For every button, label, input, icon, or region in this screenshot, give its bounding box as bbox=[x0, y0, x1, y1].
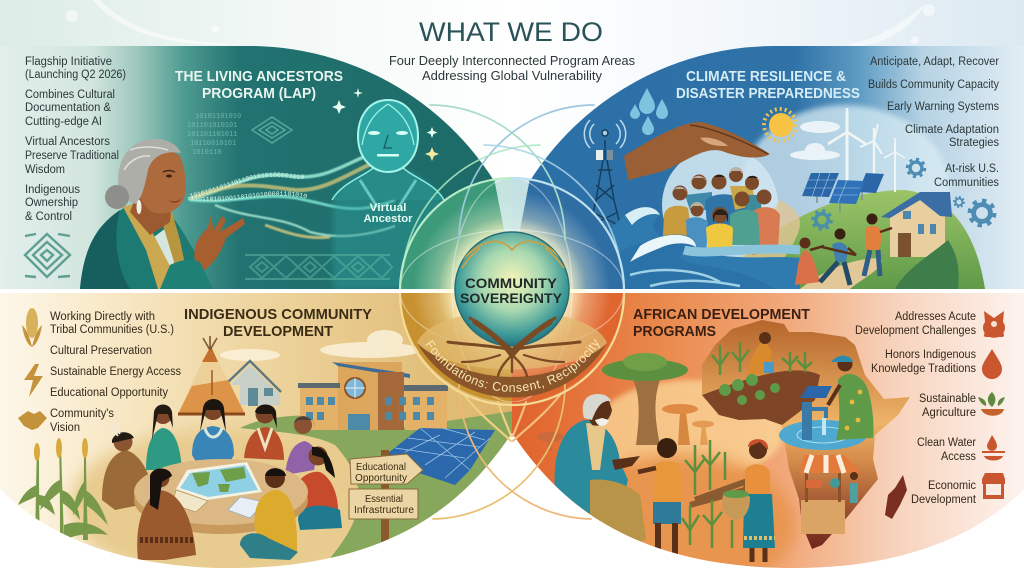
icon: wooden signpost bbox=[349, 450, 423, 542]
icon: corn stalks bbox=[18, 445, 108, 540]
subtitle: Addressing Global Vulnerability bbox=[422, 69, 603, 83]
heading: Climate Resilience: DISASTER PREPAREDNESS bbox=[676, 85, 860, 102]
sandy ground haze bbox=[63, 426, 329, 568]
text block: Climate points: Builds Community Capacity bbox=[868, 79, 999, 91]
text block: Climate points bbox=[868, 56, 999, 189]
text block: Living Ancestors points: Flagship Initiative bbox=[25, 56, 112, 68]
panel: Indigenous Community Development bbox=[0, 290, 520, 572]
text block: Climate points: At-risk U.S. bbox=[945, 163, 999, 175]
text block: African points: Knowledge Traditions bbox=[871, 363, 976, 375]
sky glow bbox=[741, 102, 950, 229]
subtitle: Four Deeply Interconnected Program Areas bbox=[389, 54, 635, 68]
icon: solar array bbox=[383, 428, 495, 485]
icon: corn bbox=[22, 308, 42, 347]
icon: lightning bolt bbox=[24, 364, 43, 397]
page background bbox=[0, 0, 1024, 289]
icon: wind turbines bbox=[828, 108, 905, 192]
icon: wooden signpost: Opportunity bbox=[355, 473, 407, 484]
protective dome bbox=[662, 147, 778, 263]
warm sun haze bbox=[606, 377, 784, 471]
icon: Madagascar bbox=[885, 475, 907, 519]
golden branches bbox=[460, 241, 565, 268]
binary code block: 1010110 bbox=[192, 149, 221, 157]
label: Virtual Ancestor bbox=[364, 203, 412, 222]
text block: Indigenous points: Cultural Preservation bbox=[50, 345, 152, 357]
icon: white house bbox=[226, 361, 281, 406]
text block: Living Ancestors points: Wisdom bbox=[25, 164, 65, 176]
text block: Living Ancestors points: Documentation & bbox=[25, 102, 111, 114]
binary code block: 101101010101 bbox=[187, 122, 237, 130]
label: Foundations text on arc: Foundations: Consent, Reciprocity bbox=[426, 338, 600, 392]
panel: Climate Resilience and Disaster Preparedness bbox=[531, 46, 995, 289]
green grass bbox=[240, 411, 512, 558]
clouds bbox=[220, 330, 420, 361]
text block: Living Ancestors points: Ownership bbox=[25, 197, 78, 209]
illustration: elder and child bbox=[555, 394, 775, 562]
icon: market stall bbox=[982, 473, 1005, 499]
label: Virtual Ancestor: Ancestor bbox=[364, 213, 413, 225]
label: Community Sovereignty: SOVEREIGNTY bbox=[460, 290, 563, 306]
dark foreground bush bbox=[895, 240, 959, 289]
text block: Living Ancestors points: Indigenous bbox=[25, 184, 80, 196]
icon: water drop bbox=[982, 349, 1002, 379]
text block: Indigenous points: Tribal Communities (U.S.) bbox=[50, 324, 174, 336]
field rows bbox=[702, 370, 820, 425]
data streams from elder to virtual ancestor bbox=[188, 145, 395, 238]
illustration: elder woman speaking bbox=[80, 139, 245, 289]
label: Community Sovereignty: COMMUNITY bbox=[465, 275, 558, 291]
heading: Indigenous Community Development bbox=[184, 306, 372, 340]
title: WHAT WE DO bbox=[419, 17, 603, 47]
brown foundations band bbox=[417, 343, 607, 398]
text block: Living Ancestors points: & Control bbox=[25, 211, 72, 223]
icon: sun bbox=[764, 109, 796, 141]
illustration: family group bbox=[662, 167, 780, 258]
text block: Living Ancestors points: Cutting-edge AI bbox=[25, 116, 102, 128]
text block: Indigenous points: Working Directly with bbox=[50, 311, 155, 323]
ground bbox=[565, 455, 795, 572]
text block: African points: Clean Water bbox=[917, 437, 976, 449]
binary stream text: 101010110111011001010100001010 bbox=[190, 172, 304, 198]
ring outline bbox=[400, 178, 624, 405]
icon: wooden signpost: Essential bbox=[365, 494, 403, 505]
icon: water drops bbox=[630, 88, 668, 135]
icon: school building bbox=[298, 362, 448, 430]
icon: woven diamond pattern bbox=[25, 234, 70, 277]
text block: African points: Agriculture bbox=[922, 407, 976, 419]
binary stream text: 110110101001101010100001101010 bbox=[190, 191, 307, 201]
text block: African points: Development bbox=[911, 494, 977, 506]
center: community sovereignty hub bbox=[398, 104, 626, 520]
icon: handshake bbox=[18, 411, 47, 430]
heading: African Development Programs: PROGRAMS bbox=[633, 323, 716, 340]
text block: Living Ancestors points: Preserve Traditional bbox=[25, 150, 119, 162]
text block: African points bbox=[855, 311, 977, 506]
text block: African points: Access bbox=[941, 451, 976, 463]
white divider between rows bbox=[0, 289, 1024, 293]
icon: baobab trees bbox=[537, 353, 714, 451]
binary code block bbox=[187, 113, 241, 157]
text block: Climate points: Communities bbox=[934, 177, 999, 189]
ring quadrants bbox=[398, 176, 626, 405]
roots bbox=[448, 318, 580, 376]
binary code block: 10110010101 bbox=[190, 140, 236, 148]
subtitle bbox=[389, 54, 635, 83]
stars bbox=[332, 88, 439, 161]
heading: African Development Programs bbox=[633, 306, 810, 340]
text block: Indigenous points: Sustainable Energy Access bbox=[50, 366, 181, 378]
label: Community Sovereignty bbox=[460, 275, 563, 306]
icon: gears right bbox=[813, 160, 994, 229]
heading: Climate Resilience: CLIMATE RESILIENCE & bbox=[686, 68, 846, 85]
text block: Climate points: Early Warning Systems bbox=[887, 101, 999, 113]
decorative top glows bbox=[66, 0, 935, 48]
text block: Living Ancestors points bbox=[25, 56, 126, 223]
illustration: workers on path bbox=[795, 214, 892, 285]
icon: solar panels bbox=[802, 173, 884, 212]
text block: Climate points: Strategies bbox=[949, 137, 999, 149]
icon: clean water bowl bbox=[982, 435, 1005, 460]
illustration: ocean waves bbox=[609, 207, 800, 289]
heading: African Development Programs: AFRICAN DEVELOPMENT bbox=[633, 306, 810, 323]
woven pattern strip bbox=[245, 255, 392, 279]
interlocking arcs bbox=[403, 105, 621, 519]
text block: Climate points: Anticipate, Adapt, Recover bbox=[870, 56, 999, 68]
text block: African points: Honors Indigenous bbox=[885, 349, 976, 361]
text block: Indigenous points: Educational Opportunity bbox=[50, 387, 168, 399]
panel: African Development Programs bbox=[500, 290, 1024, 572]
icon: tipi bbox=[178, 336, 245, 414]
text block: African points: Addresses Acute bbox=[895, 311, 976, 323]
text block: African points: Economic bbox=[928, 480, 976, 492]
icon: gears bbox=[552, 210, 596, 254]
binary code block: 10101101010 bbox=[195, 113, 241, 121]
icon: communications tower bbox=[584, 120, 626, 225]
water pump with solar panel bbox=[779, 420, 867, 450]
market stall bbox=[801, 500, 845, 534]
icon: acute challenges bbox=[983, 311, 1005, 338]
icon: house bbox=[881, 192, 952, 257]
diamond motif bbox=[252, 117, 292, 143]
text block: African points: Development Challenges bbox=[855, 325, 976, 337]
green hill bbox=[720, 190, 985, 289]
heading: Indigenous Community Development: INDIGENOUS COMMUNITY bbox=[184, 306, 372, 323]
farmer bending bbox=[748, 340, 772, 374]
binary code block: 101101101011 bbox=[187, 131, 237, 139]
illustration: map of Africa bbox=[702, 320, 910, 549]
text block: Indigenous points bbox=[50, 311, 181, 434]
text block: African points: Sustainable bbox=[919, 393, 976, 405]
text block: Climate points: Climate Adaptation bbox=[905, 124, 999, 136]
icon: leaves and soil bbox=[978, 392, 1005, 416]
woman at pump bbox=[836, 374, 873, 440]
text block: Living Ancestors points: Combines Cultural bbox=[25, 89, 115, 101]
text block: Living Ancestors points: Virtual Ancestors bbox=[25, 136, 110, 148]
panel: The Living Ancestors Program bbox=[56, 46, 493, 289]
crops foreground bbox=[682, 440, 750, 548]
heading: Living Ancestors bbox=[175, 68, 343, 102]
heading: Living Ancestors: THE LIVING ANCESTORS bbox=[175, 68, 343, 85]
heading: Indigenous Community Development: DEVELOPMENT bbox=[223, 323, 333, 340]
sphere bbox=[455, 232, 569, 346]
text block: Indigenous points: Community's bbox=[50, 408, 114, 420]
text block: Indigenous points: Vision bbox=[50, 422, 80, 434]
icon: wooden signpost: Educational bbox=[356, 462, 406, 473]
label: Virtual Ancestor: Virtual bbox=[370, 202, 406, 214]
illustration: sheltering hand bbox=[624, 122, 770, 180]
heading: Living Ancestors: PROGRAM (LAP) bbox=[202, 85, 316, 102]
illustration: council circle around table bbox=[102, 399, 342, 560]
icon: virtual ancestor hologram bbox=[332, 88, 444, 289]
icon: wooden signpost: Infrastructure bbox=[354, 505, 414, 516]
text block: Living Ancestors points: (Launching Q2 2026) bbox=[25, 69, 126, 81]
heading: Climate Resilience bbox=[676, 68, 860, 102]
clouds bbox=[790, 121, 840, 160]
